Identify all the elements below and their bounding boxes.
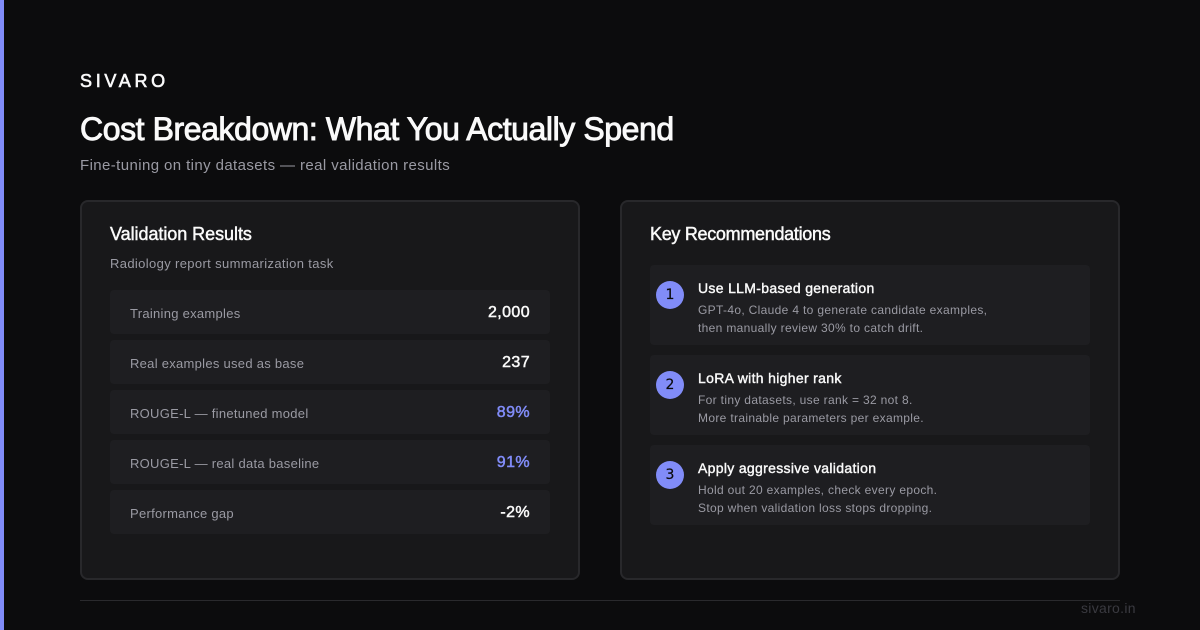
metric: finetuned model: 89% bbox=[497, 404, 530, 420]
recommendation 2: LoRA with higher rank bbox=[698, 370, 842, 386]
recommendation 3 bbox=[650, 445, 1090, 525]
metric: real examples: 237 bbox=[502, 354, 530, 370]
heading: validation results: Validation Results bbox=[110, 224, 252, 244]
caption: task: Radiology report summarization task bbox=[110, 256, 334, 271]
footer rule bbox=[80, 600, 1120, 601]
metric: training examples: Training examples bbox=[130, 306, 240, 320]
recommendation 1: 1 bbox=[666, 287, 674, 303]
brand: SIVARO bbox=[80, 71, 169, 91]
recommendation 2 bbox=[650, 355, 1090, 435]
title: Cost Breakdown: What You Actually Spend bbox=[80, 111, 674, 147]
panel: validation results bbox=[80, 200, 580, 580]
recommendation 1: then manually review 30% to catch drift. bbox=[698, 321, 923, 335]
metric: real data baseline bbox=[110, 440, 550, 484]
metric: finetuned model: ROUGE-L — finetuned model bbox=[130, 406, 308, 420]
metric: finetuned model bbox=[110, 390, 550, 434]
metric: real data baseline: 91% bbox=[497, 454, 530, 470]
heading: key recommendations: Key Recommendations bbox=[650, 224, 830, 244]
metric: real examples: Real examples used as base bbox=[130, 356, 304, 370]
metric: performance gap: -2% bbox=[500, 504, 530, 520]
recommendation 3: Stop when validation loss stops dropping. bbox=[698, 501, 932, 515]
metric: training examples bbox=[110, 290, 550, 334]
recommendation 3: Apply aggressive validation bbox=[698, 460, 876, 476]
metric: performance gap: Performance gap bbox=[130, 506, 234, 520]
recommendation 2: More trainable parameters per example. bbox=[698, 411, 924, 425]
metric: performance gap bbox=[110, 490, 550, 534]
metric: training examples: 2,000 bbox=[488, 304, 530, 320]
metric: real data baseline: ROUGE-L — real data baseline bbox=[130, 456, 319, 470]
metric: real examples bbox=[110, 340, 550, 384]
accent bar bbox=[0, 0, 4, 630]
recommendation 1 bbox=[650, 265, 1090, 345]
recommendation 3: Hold out 20 examples, check every epoch. bbox=[698, 483, 937, 497]
subtitle: Fine-tuning on tiny datasets — real validation results bbox=[80, 156, 450, 174]
recommendation 1: Use LLM-based generation bbox=[698, 280, 875, 296]
panel: key recommendations bbox=[620, 200, 1120, 580]
recommendation 1: GPT-4o, Claude 4 to generate candidate examples, bbox=[698, 303, 987, 317]
recommendation 2: For tiny datasets, use rank = 32 not 8. bbox=[698, 393, 913, 407]
recommendation 3: 3 bbox=[666, 467, 674, 483]
recommendation 2: 2 bbox=[666, 377, 674, 393]
footer url: sivaro.in bbox=[1081, 600, 1136, 616]
